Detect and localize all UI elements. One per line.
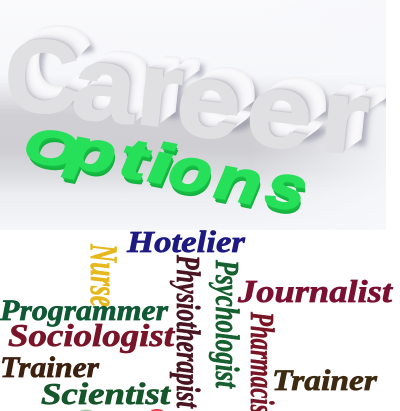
word: Trainer right: Trainer <box>272 364 377 397</box>
word: Options: t <box>110 127 161 191</box>
word: Sociologist: Sociologist <box>8 317 175 353</box>
word: Options: i <box>138 132 186 195</box>
word: Trainer left: Trainer <box>0 351 99 384</box>
word: Career: e <box>171 40 247 163</box>
word: Programmer: Programmer <box>0 294 168 327</box>
word: Options: n <box>204 145 276 217</box>
word: Options: o <box>158 135 226 206</box>
clipped word tops at bottom edge <box>80 409 163 411</box>
word: Options: O <box>15 119 88 179</box>
word: Career <box>5 19 386 178</box>
word: Career: r <box>131 30 188 151</box>
word: Options: p <box>57 117 129 185</box>
word: Options <box>15 117 320 224</box>
word: Career: r <box>314 57 375 178</box>
word: Nurse: Nurse <box>82 243 125 307</box>
word: Options: s <box>255 152 320 224</box>
word cloud of careers <box>0 230 394 411</box>
word: Journalist: Journalist <box>237 273 393 309</box>
hero image: Career Options 3D lettering <box>0 0 386 230</box>
word: Career: e <box>241 50 319 173</box>
word: Scientist: Scientist <box>41 376 172 411</box>
word: Career: a <box>67 24 142 147</box>
word: Career: C <box>5 19 79 134</box>
